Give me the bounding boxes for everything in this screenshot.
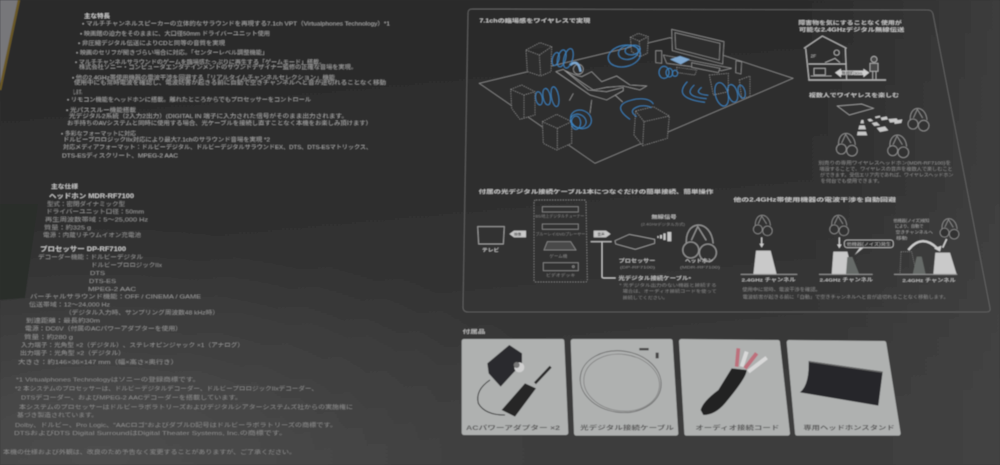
- text block: footnotes: DTSデコーダー、およびMPEG-2 AACデコーダーを搭載しています。: [21, 394, 242, 402]
- text block: main features: DTS-ESディスクリート、MPEG-2 AAC: [62, 152, 178, 160]
- sound waves: [535, 42, 747, 132]
- text block: specifications: DTS-ES: [89, 279, 116, 285]
- description: [742, 286, 949, 301]
- text block: specifications: 出力端子：光角型 ×2（デジタル）: [20, 349, 125, 357]
- distance arrow: 無線約30m: [842, 69, 863, 75]
- card: headphone stand: 専用ヘッドホンスタンド: [803, 424, 895, 432]
- heading: 付属品: [463, 328, 485, 335]
- card: audio cord: オーディオ接続コード: [695, 424, 779, 432]
- optical cable line: [591, 242, 616, 278]
- text block: specifications: 大きさ：約146×36×147 mm（幅×高さ×奥行き）: [18, 358, 178, 366]
- text block: specifications: 質量：約325 g: [44, 224, 91, 232]
- room floor: [479, 38, 793, 163]
- cable note: * 光デジタル出力のない機器と接続する: [619, 282, 717, 288]
- text block: main features: • マルチチャンネルサラウンドのゲームを臨場感たっぷりに再生する「ゲームモード」搭載。: [75, 58, 325, 66]
- processor: [670, 56, 690, 64]
- text block: main features: • 多彩なフォーマットに対応: [61, 130, 136, 138]
- source devices: [534, 200, 587, 282]
- text block: specifications: ヘッドホン MDR-RF7100: [49, 192, 135, 200]
- cable note: 場合は、オーディオ接続コードを使って: [623, 288, 717, 294]
- listener in chair: [556, 63, 647, 113]
- text block: main features: 株式会社ソニー・コンピュータエンタテインメントのサウンドデザイナー監修の正確な音場を実現。: [79, 63, 357, 71]
- text block: main features: • リモコン機能をヘッドホンに搭載。離れたところからでもプロセッサーをコントロール: [67, 96, 311, 104]
- wireless signal: 無線信号: [651, 214, 677, 221]
- text block: main features: [61, 12, 390, 160]
- text block: specifications: （デジタル入力時、サンプリング周波数48 kHz時）: [65, 308, 219, 316]
- panel: accessories: [463, 328, 898, 433]
- processor icon: [615, 234, 656, 269]
- multi-headphone diagram: [836, 104, 929, 158]
- text block: main features: • 他の2.4GHz帯使用機器の電波干渉を回避する「リアルタイムチャンネルセレクション」機能: [72, 74, 335, 82]
- text block: footnotes: *1 Virtualphones Technologyはソニーの登録商標です。: [16, 376, 200, 384]
- channel step 3: [893, 217, 959, 284]
- description: [818, 160, 954, 185]
- channel step 2: 2.4GHz チャンネル: [820, 277, 873, 284]
- text block: main features: ドルビープロロジックIIx対応により最大7.1chのサラウンド音場を実現 *2: [63, 136, 270, 144]
- cable note: 接続してください。: [623, 294, 668, 300]
- text block: specifications: 質量：約280 g: [24, 333, 73, 341]
- text block: footnotes: 本システムのプロセッサーはドルビーラボラトリーズおよびデジタルシアターシステムズ社からの実施権に: [19, 403, 353, 411]
- headphones: [680, 225, 721, 269]
- heading: 複数人でワイヤレスを楽しむ: [809, 91, 900, 99]
- processor icon: (DP-RF7100): [620, 264, 656, 269]
- text block: footnotes: [3, 376, 353, 456]
- card: optical cable: 光デジタル接続ケーブル: [580, 424, 674, 432]
- channel step 1: 2.4GHz チャンネル: [742, 276, 796, 283]
- text block: specifications: MPEG-2 AAC: [88, 287, 137, 293]
- heading: 他の2.4GHz帯使用機器の電波干渉を自動回避: [733, 196, 897, 204]
- text block: specifications: ドルビープロロジックIIx: [91, 261, 162, 269]
- text block: specifications: 到達距離：最長約30m: [26, 316, 100, 324]
- channel step 3: 空きチャンネルへ: [896, 229, 933, 235]
- card: headphone stand: [789, 342, 898, 433]
- panel: 7.1ch room illustration: [479, 17, 793, 163]
- TV rack: [656, 29, 742, 75]
- text block: footnotes: 本機の仕様および外観は、改良のため予告なく変更することがありますが、ご了承ください。: [3, 448, 296, 456]
- source devices: ゲーム機: [549, 252, 567, 258]
- text block: main features: • 映画のセリフが聞きづらい場合に対応。「センターレベル調整機能」: [76, 48, 268, 56]
- description: を何台でも使用できます。: [821, 178, 883, 185]
- channel step 2: [819, 215, 893, 284]
- text block: footnotes: Dolby、ドルビー、Pro Logic、"AACロゴ"およびダブルD記号はドルビーラボラトリーズの商標です。: [15, 421, 337, 429]
- panel: feature frame: [463, 9, 990, 312]
- text block: specifications: [18, 182, 244, 366]
- source devices: ブルーレイ/DVDプレーヤー: [535, 231, 585, 237]
- description: 別売りの専用ワイヤレスヘッドホン(MDR-RF7100)を: [818, 160, 951, 167]
- text block: specifications: 伝送帯域：12～24,000 Hz: [29, 300, 110, 308]
- house icon: 2F: [811, 53, 816, 58]
- channel step 2: 他機器(ノイズ)発生: [847, 241, 891, 247]
- text block: specifications: ドライバーユニット口径：50mm: [46, 208, 144, 216]
- standing person: [870, 56, 878, 79]
- text block: main features: 対応メディアフォーマット：ドルビーデジタル、ドルビーデジタルサラウンドEX、DTS、DTS-ESマトリックス、: [63, 143, 372, 151]
- text block: main features: します。: [73, 89, 84, 96]
- text block: footnotes: 基づき製造されています。: [17, 411, 98, 419]
- text block: footnotes: *2 本システムのプロセッサーは、ドルビーデジタルデコーダー、ドルビープロロジックIIxデコーダー、: [15, 384, 318, 392]
- video arrow: 映像: [514, 232, 522, 237]
- processor icon: プロセッサー: [619, 257, 655, 264]
- text block: specifications: 型式：密閉ダイナミック型: [47, 200, 125, 208]
- text block: specifications: デコーダー機能：ドルビーデジタル: [38, 253, 143, 261]
- cable note: 光デジタル接続ケーブル*: [618, 275, 691, 282]
- text block: main features: 光デジタル2系統（2入力2出力）(DIGITAL IN 端子に入力された信号がそのまま出力されます。: [69, 112, 348, 120]
- source devices: BS/地上デジタルチューナー: [535, 213, 584, 219]
- source devices: ビデオデッキ: [546, 272, 575, 278]
- text block: specifications: 主な仕様: [51, 182, 78, 190]
- heading: 付属の光デジタル接続ケーブル1本につなぐだけの簡単接続、簡単操作: [479, 187, 714, 195]
- headphones: ヘッドホン: [685, 257, 713, 264]
- cable note: [618, 275, 717, 300]
- card: AC adapter: [464, 341, 566, 433]
- box corner: [0, 0, 38, 300]
- panel: auto channel selection: [733, 196, 959, 301]
- audio arrow: 音声: [597, 232, 605, 237]
- description: 使用中に常時、電波干渉を確認。: [742, 286, 821, 293]
- text block: main features: 主な特長: [84, 12, 110, 20]
- text block: specifications: 電源：DC6V（付属のACパワーアダプターを使用）: [25, 324, 182, 332]
- distance arrow: [835, 69, 869, 77]
- heading: 障害物を気にすることなく使用が: [798, 18, 903, 26]
- wireless signal: [641, 214, 685, 241]
- text block: main features: 使用中にも常時電波を確認し、電波妨害が起きる前に自動で空きチャンネルへと音が途切れることなく移動: [74, 78, 386, 86]
- text block: main features: • マルチチャンネルスピーカーの立体的なサラウンドを再現する7.1ch VPT（Virtualphones Technology）*1: [82, 20, 390, 28]
- description: ができます。受信エリア内であれば、ワイヤレスヘッドホン: [820, 172, 954, 179]
- speakers: [511, 33, 750, 150]
- channel step 3: 移動: [896, 235, 907, 241]
- description: 増設することで、ワイヤレスの音声を複数人で楽しむこと: [819, 166, 953, 173]
- heading: 7.1chの臨場感をワイヤレスで実現: [479, 17, 591, 25]
- text block: main features: • 光パススルー機能搭載: [66, 106, 136, 114]
- headphones: (MDR-RF7100): [680, 264, 721, 269]
- text block: specifications: バーチャルサラウンド機能：OFF / CINEMA / GAME: [30, 292, 201, 300]
- text block: specifications: DTS: [90, 271, 105, 277]
- card: AC adapter: ACパワーアダプター ×2: [466, 424, 561, 432]
- panel: wireless through obstacles: [798, 18, 954, 185]
- panel: simple connection: [478, 187, 721, 300]
- channel step 3: 2.4GHz チャンネル: [902, 277, 956, 284]
- description: 電波妨害が起きる前に「自動」で空きチャンネルへと音が途切れることなく移動します。: [743, 294, 949, 301]
- text block: footnotes: DTSおよびDTS Digital SurroundはDigital Theater Systems, Inc.の商標です。: [14, 429, 287, 437]
- house icon: [804, 36, 886, 80]
- TV icon: [478, 227, 504, 254]
- text block: specifications: 電源：内蔵リチウムイオン充電池: [43, 231, 141, 239]
- TV icon: テレビ: [482, 247, 500, 254]
- text block: specifications: 入力端子：光角型 ×2（デジタル）、ステレオピンジャック ×1（アナログ）: [21, 341, 244, 349]
- card: optical cable: [573, 341, 676, 433]
- video arrow: [509, 231, 526, 237]
- channel step 3: 他機器(ノイズ)検知: [893, 217, 929, 223]
- audio arrow: [594, 231, 611, 237]
- text block: main features: • 映画館の迫力をそのままに、大口径50mm ドライバーユニット使用: [80, 30, 270, 38]
- text block: main features: お手持ちのAVシステムと同時に使用する場合、光ケーブルを接続し直すことなく本機をお楽しみ頂けます）: [67, 119, 372, 127]
- panel: wireless through obstacles: 可能な2.4GHzデジタル無線伝送: [799, 26, 905, 34]
- wireless signal: (2.4GHzデジタル方式): [641, 221, 685, 226]
- text block: specifications: プロセッサー DP-RF7100: [40, 245, 127, 253]
- text block: main features: • 非圧縮デジタル伝送によりCDと同等の音質を実現: [78, 39, 225, 47]
- channel step 3: により、自動で: [895, 223, 923, 229]
- card: audio cord: [681, 341, 788, 433]
- text block: specifications: 再生周波数帯域：5～25,000 Hz: [45, 216, 148, 224]
- channel step 1: [741, 215, 797, 283]
